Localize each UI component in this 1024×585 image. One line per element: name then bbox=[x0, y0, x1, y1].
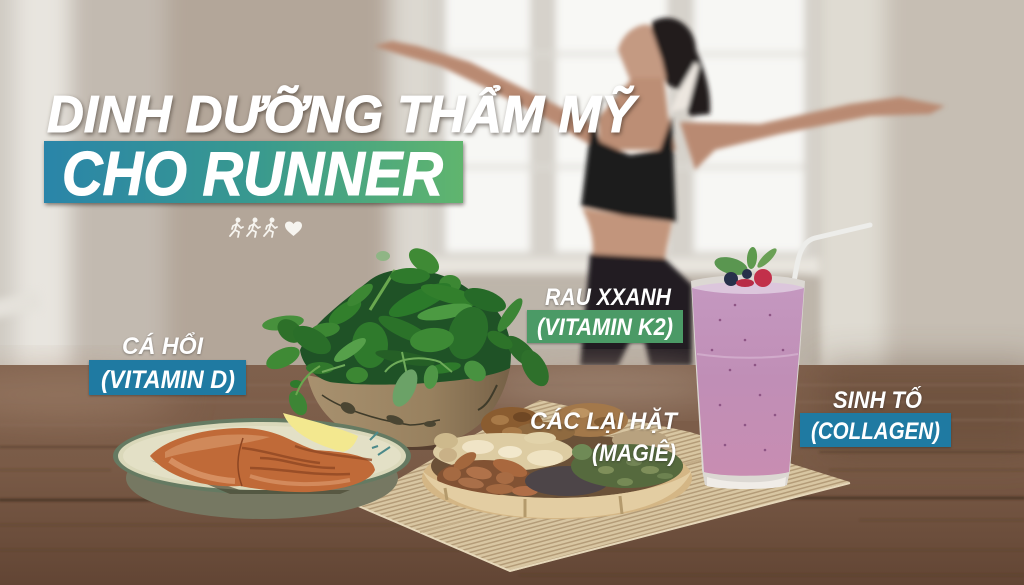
glass and shake bbox=[691, 275, 805, 489]
label: salmon: CÁ HỔI bbox=[122, 332, 204, 360]
label: salmon: (VITAMIN D) bbox=[101, 366, 235, 394]
label: smoothie: (COLLAGEN) bbox=[811, 418, 940, 445]
smoothie glass bbox=[691, 225, 870, 489]
icon: runner 3 bbox=[264, 218, 277, 237]
label: salmon bbox=[89, 332, 246, 395]
label: greens: RAU XXANH bbox=[545, 284, 672, 311]
greens bbox=[261, 243, 555, 418]
label: nuts: (MAGIÊ) bbox=[592, 439, 676, 467]
lemon wedge bbox=[283, 413, 358, 452]
icon: runner 1 bbox=[230, 218, 243, 237]
title line 1: DINH DƯỠNG THẨM MỸ bbox=[47, 85, 639, 144]
cashews bbox=[433, 432, 573, 471]
window bbox=[0, 0, 820, 368]
label: nuts: CÁC LẠI HẶT bbox=[530, 407, 679, 435]
bowl of greens bbox=[261, 243, 555, 450]
blurred woman stretching bbox=[374, 18, 945, 366]
label: smoothie bbox=[800, 386, 951, 447]
bowl bbox=[307, 368, 510, 450]
chia seeds bbox=[525, 466, 609, 496]
pumpkin seeds bbox=[571, 444, 683, 488]
almonds bbox=[437, 449, 538, 496]
title highlight bar: CHO RUNNER bbox=[62, 140, 443, 209]
label: nuts bbox=[530, 407, 679, 467]
icon: runner 2 bbox=[247, 218, 260, 237]
mint and berries bbox=[713, 246, 779, 287]
bamboo mat bbox=[355, 400, 850, 572]
walnuts and pecans bbox=[481, 403, 668, 450]
salmon fillet bbox=[150, 428, 375, 494]
plate of salmon bbox=[113, 413, 411, 519]
basket of nuts and seeds bbox=[422, 403, 692, 519]
label: greens bbox=[527, 284, 683, 343]
wooden table bbox=[0, 365, 1024, 585]
straw bbox=[794, 225, 870, 282]
icons: three runners and heart bbox=[230, 218, 302, 237]
title bbox=[44, 85, 639, 209]
label: greens: (VITAMIN K2) bbox=[537, 314, 673, 341]
label: smoothie: SINH TỐ bbox=[833, 386, 922, 414]
icon: heart bbox=[285, 221, 302, 236]
background: blurred room bbox=[0, 0, 1024, 390]
